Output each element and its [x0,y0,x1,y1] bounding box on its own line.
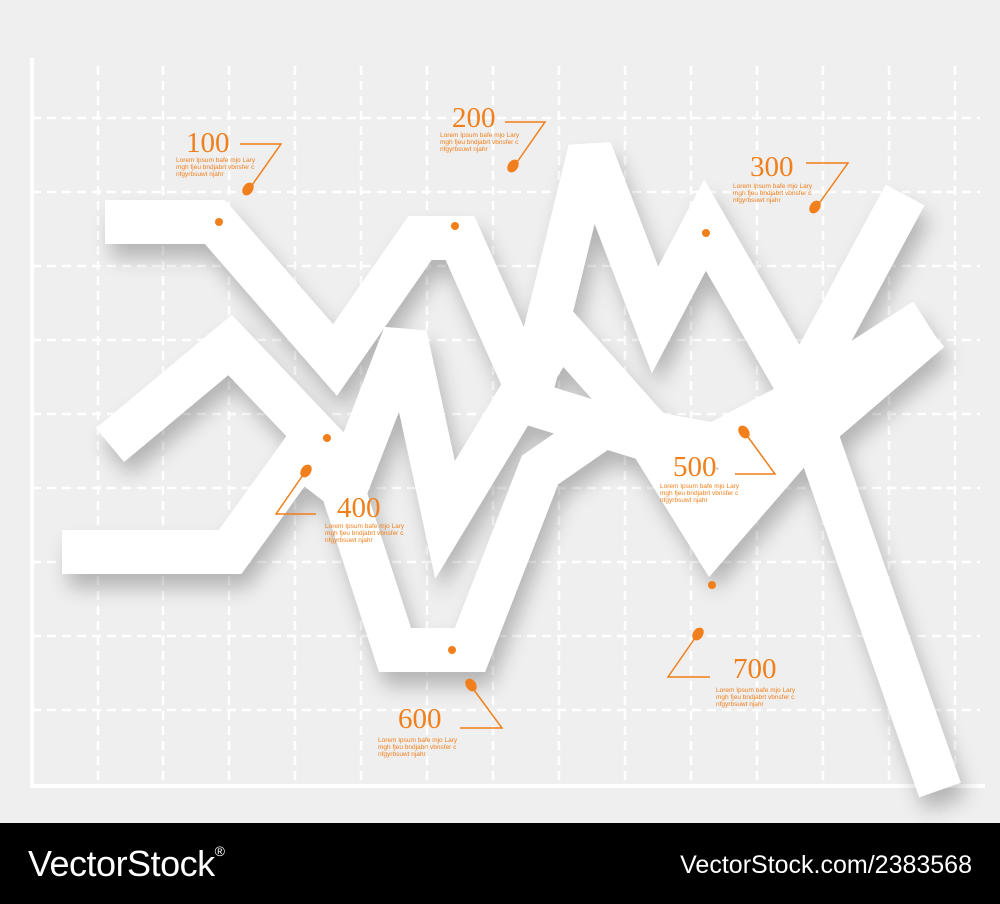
label 300: 300 [750,151,794,183]
label 300: nfgyrbsuwt njahr [733,197,782,204]
label 700: mgh fjeu bndjabrt vbnsfer c [716,694,795,701]
label 400: Lorem Ipsum bafe mjo Lary [325,523,405,530]
label 600: nfgyrbsuwt njahr [378,751,427,758]
label 600: mgh fjeu bndjabrt vbnsfer c [378,744,457,751]
label 400: nfgyrbsuwt njahr [325,537,374,544]
label 500: mgh fjeu bndjabrt vbnsfer c [660,490,739,497]
label 400: 400 [337,492,380,524]
label 500: 500 [673,451,716,483]
label 100: Lorem Ipsum bafe mjo Lary [176,157,256,164]
label 200: nfgyrbsuwt njahr [440,146,489,153]
axes [32,58,985,786]
label 300: mgh fjeu bndjabrt vbnsfer c [733,190,812,197]
label 200 [440,102,545,175]
label 500 [660,423,775,504]
dots [215,218,716,654]
label 300 [733,151,848,216]
label 600: 600 [398,703,442,735]
label 700: Lorem Ipsum bafe mjo Lary [716,687,796,694]
footer brand: VectorStock® [28,843,224,884]
label 500: nfgyrbsuwt njahr [660,497,709,504]
ribbons [62,150,940,790]
label 500: Lorem Ipsum bafe mjo Lary [660,483,740,490]
label 200: 200 [452,102,496,134]
label 600: Lorem Ipsum bafe mjo Lary [378,737,458,744]
label 200: Lorem Ipsum bafe mjo Lary [440,132,520,139]
label 300: Lorem Ipsum bafe mjo Lary [733,183,813,190]
label 700 [668,625,796,708]
label 600 [378,676,502,758]
label 400 [276,462,405,544]
label 400: mgh fjeu bndjabrt vbnsfer c [325,530,404,537]
label 100 [176,127,281,198]
label 100: nfgyrbsuwt njahr [176,171,225,178]
label 100: mgh fjeu bndjabrt vbnsfer c [176,164,255,171]
label 700: nfgyrbsuwt njahr [716,701,765,708]
label 200: mgh fjeu bndjabrt vbnsfer c [440,139,519,146]
footer bar [0,823,1000,904]
footer id: VectorStock.com/2383568 [680,851,972,879]
label 700: 700 [733,653,776,685]
label 100: 100 [186,127,230,159]
